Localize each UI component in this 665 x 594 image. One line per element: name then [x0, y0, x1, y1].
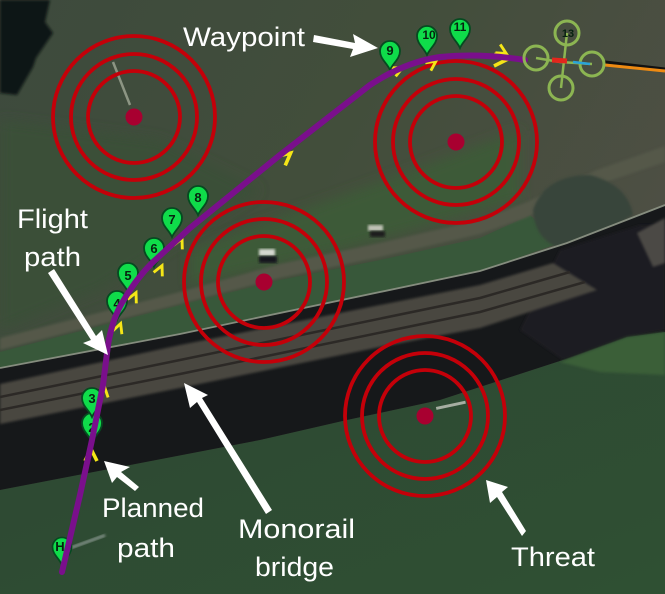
flight path	[62, 56, 525, 572]
label: Threat	[486, 480, 596, 572]
threat 2	[375, 61, 537, 223]
label: Threat: Threat	[511, 542, 596, 572]
waypoint markers: 5	[124, 268, 132, 283]
planned path chevrons	[80, 44, 509, 500]
waypoint markers: H	[55, 539, 65, 554]
waypoint markers: 9	[386, 43, 394, 58]
threat 4	[345, 336, 505, 496]
label: Waypoint: Waypoint	[183, 22, 306, 52]
label: Monorail bridge: Monorail	[238, 514, 355, 544]
threat 1	[53, 36, 215, 198]
bridge wall shaded right	[520, 225, 665, 360]
label: Flight path	[17, 204, 108, 355]
waypoint markers: 10	[422, 28, 436, 42]
bridge wall dark	[0, 205, 665, 490]
label: Monorail bridge	[184, 383, 355, 582]
waypoint markers: 4	[113, 296, 121, 311]
waypoint markers: 2	[88, 420, 96, 435]
label: Monorail bridge: bridge	[255, 552, 334, 582]
waypoint markers: 8	[194, 190, 202, 205]
threat 3	[184, 202, 344, 362]
label: Waypoint	[183, 22, 378, 57]
drone icon	[524, 21, 604, 100]
dirt track	[0, 146, 665, 350]
arrow: planned path	[104, 461, 139, 491]
small objects	[113, 62, 130, 105]
field bottom	[0, 330, 665, 594]
waypoint markers: 7	[168, 212, 176, 227]
label: Planned path: path	[117, 533, 175, 563]
arrow: monorail bridge	[184, 383, 272, 514]
lower grass light patch	[560, 332, 665, 375]
arrow: threat	[486, 480, 526, 536]
dark tree top left	[0, 0, 53, 95]
arrow: waypoint	[313, 34, 378, 57]
flight track tail	[605, 62, 665, 71]
label: Flight path: path	[24, 242, 81, 272]
arrow: flight path	[48, 269, 108, 355]
bridge deck	[0, 263, 597, 424]
waypoint markers: 6	[150, 241, 158, 256]
tree right	[533, 175, 633, 248]
bridge top edge	[0, 205, 665, 368]
waypoint markers	[52, 19, 470, 565]
waypoint markers: 3	[88, 391, 96, 406]
label: Flight path: Flight	[17, 204, 89, 234]
label: Planned path	[102, 461, 204, 563]
label: Planned path: Planned	[102, 493, 204, 523]
grass strip beneath track	[0, 215, 560, 368]
waypoint markers: 11	[454, 20, 467, 34]
green field left	[0, 120, 260, 330]
drone icon: 13	[562, 28, 574, 40]
